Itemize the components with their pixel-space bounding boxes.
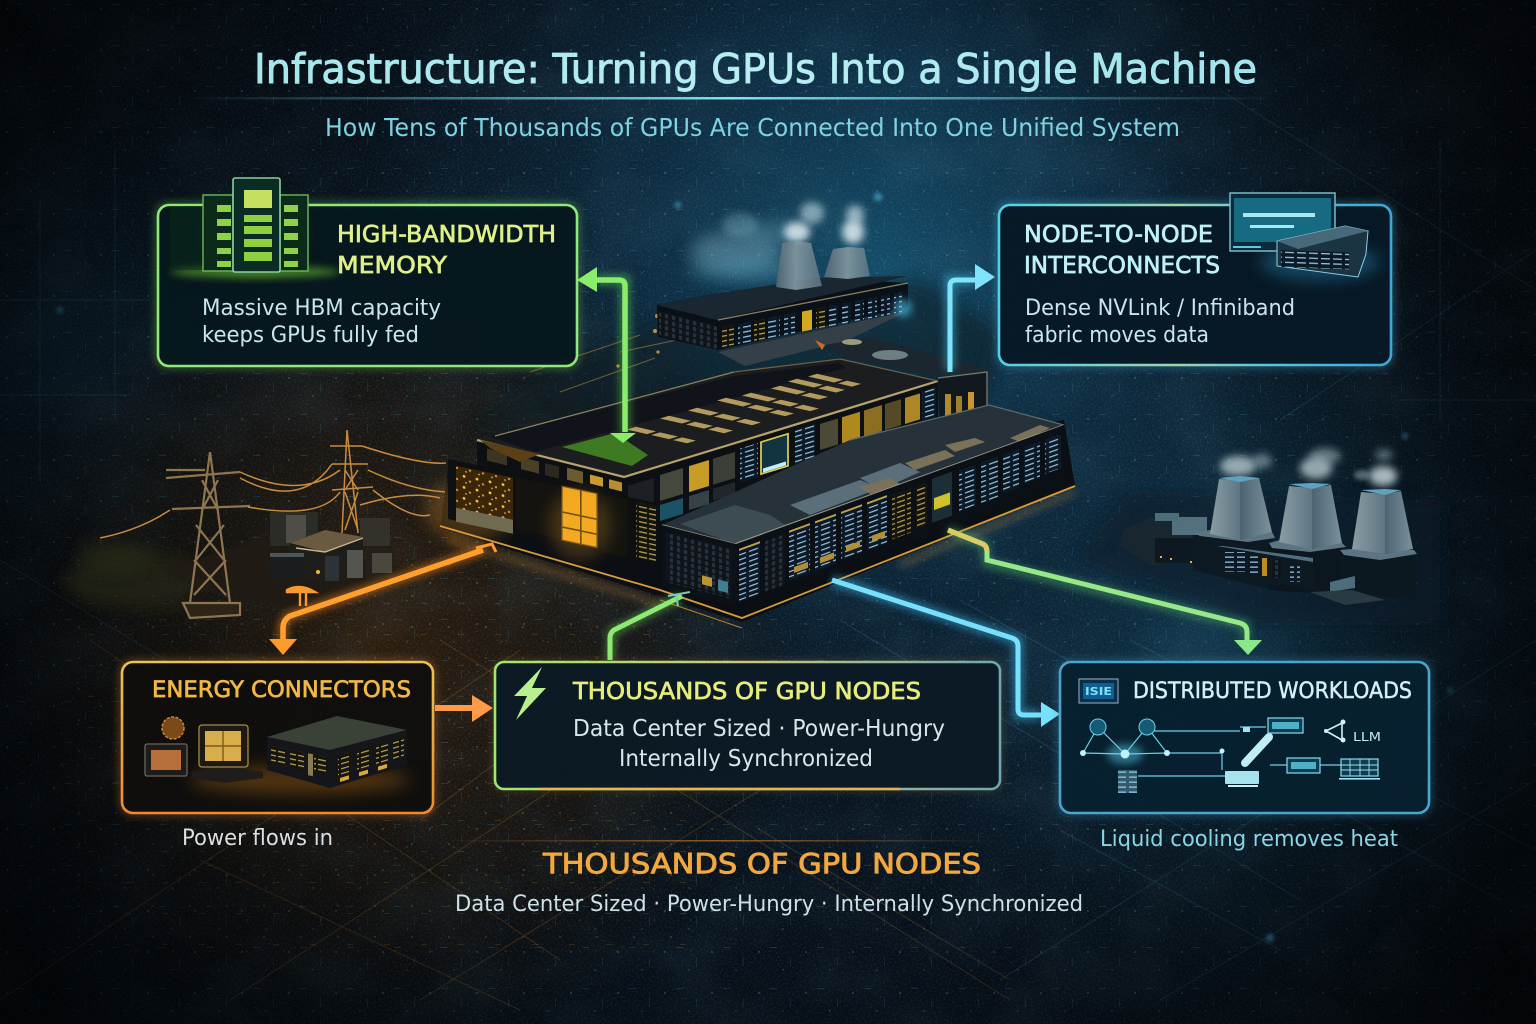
lower block left face [662, 525, 736, 606]
panel: thousands of GPU nodes [495, 662, 1000, 789]
footer heading: THOUSANDS OF GPU NODES [542, 847, 981, 880]
body text: fabric moves data [1025, 323, 1209, 348]
upper block left face [477, 440, 624, 503]
background ground haze behind rear plant [470, 280, 1000, 430]
icon: hardware illustration [145, 716, 410, 794]
background plant: rear cooling building [657, 202, 912, 366]
corner service tower [938, 372, 987, 432]
arrow: cyan to node interconnects [950, 264, 995, 372]
panel: high-bandwidth memory [158, 178, 577, 366]
glow around yellow window [550, 491, 610, 559]
ground base plate [425, 420, 1075, 628]
caption: power flows in: Power flows in [182, 826, 333, 851]
background plant: cooling towers at right [1075, 448, 1440, 625]
arrow: green to GPU nodes [610, 592, 690, 660]
diagram: workload network [1080, 718, 1381, 793]
arrow: green to high-bandwidth memory [577, 267, 636, 443]
title divider [185, 97, 1280, 100]
arrow: green to cooling plant and workloads [948, 530, 1262, 655]
body text: Dense NVLink / Infiniband [1025, 296, 1295, 321]
icon: chip badge [1079, 679, 1118, 703]
upper block roof [477, 359, 938, 477]
body text: Data Center Sized · Power-Hungry [573, 716, 945, 742]
heading: HIGH-BANDWIDTH [337, 222, 556, 248]
icon: switch and monitor [1230, 193, 1380, 280]
icon: lightning bolt [514, 667, 546, 720]
diagram: workload network: LLM [1353, 730, 1381, 744]
caption: liquid cooling: Liquid cooling removes heat [1100, 827, 1398, 852]
body text: keeps GPUs fully fed [202, 323, 419, 348]
title: Infrastructure: Turning GPUs Into a Single Machine [254, 45, 1257, 93]
footer text: Data Center Sized · Power-Hungry · Internally Synchronized [455, 892, 1083, 917]
rear roof unit [815, 337, 988, 380]
heading: MEMORY [337, 253, 448, 279]
icon: server racks [170, 178, 340, 278]
panel: energy connectors [122, 662, 433, 813]
arrow: orange energy feed to connectors [269, 544, 496, 655]
heading: DISTRIBUTED WORKLOADS [1133, 679, 1412, 704]
subtitle: How Tens of Thousands of GPUs Are Connected Into One Unified System [325, 113, 1180, 142]
body text: Internally Synchronized [619, 746, 873, 772]
central data center building [425, 337, 1075, 628]
footer divider [440, 840, 1000, 842]
body text: Massive HBM capacity [202, 296, 441, 321]
arrow: blue to distributed workloads [832, 580, 1060, 727]
heading: INTERCONNECTS [1024, 253, 1220, 279]
heading: ENERGY CONNECTORS [152, 678, 411, 703]
background plant: power pylons and substation [65, 430, 446, 618]
arrow: energy to GPU nodes [435, 695, 493, 722]
heading: THOUSANDS OF GPU NODES [572, 679, 921, 705]
upper block right face with windows [624, 381, 938, 537]
lower block roof [662, 405, 1064, 548]
panel: distributed workloads [1060, 662, 1429, 813]
panel: node-to-node interconnects [999, 193, 1391, 365]
icon: chip badge: ISIE [1085, 685, 1112, 698]
heading: NODE-TO-NODE [1024, 222, 1213, 248]
lower-left annex face [448, 459, 658, 564]
lower block right face with data panels [736, 425, 1064, 606]
